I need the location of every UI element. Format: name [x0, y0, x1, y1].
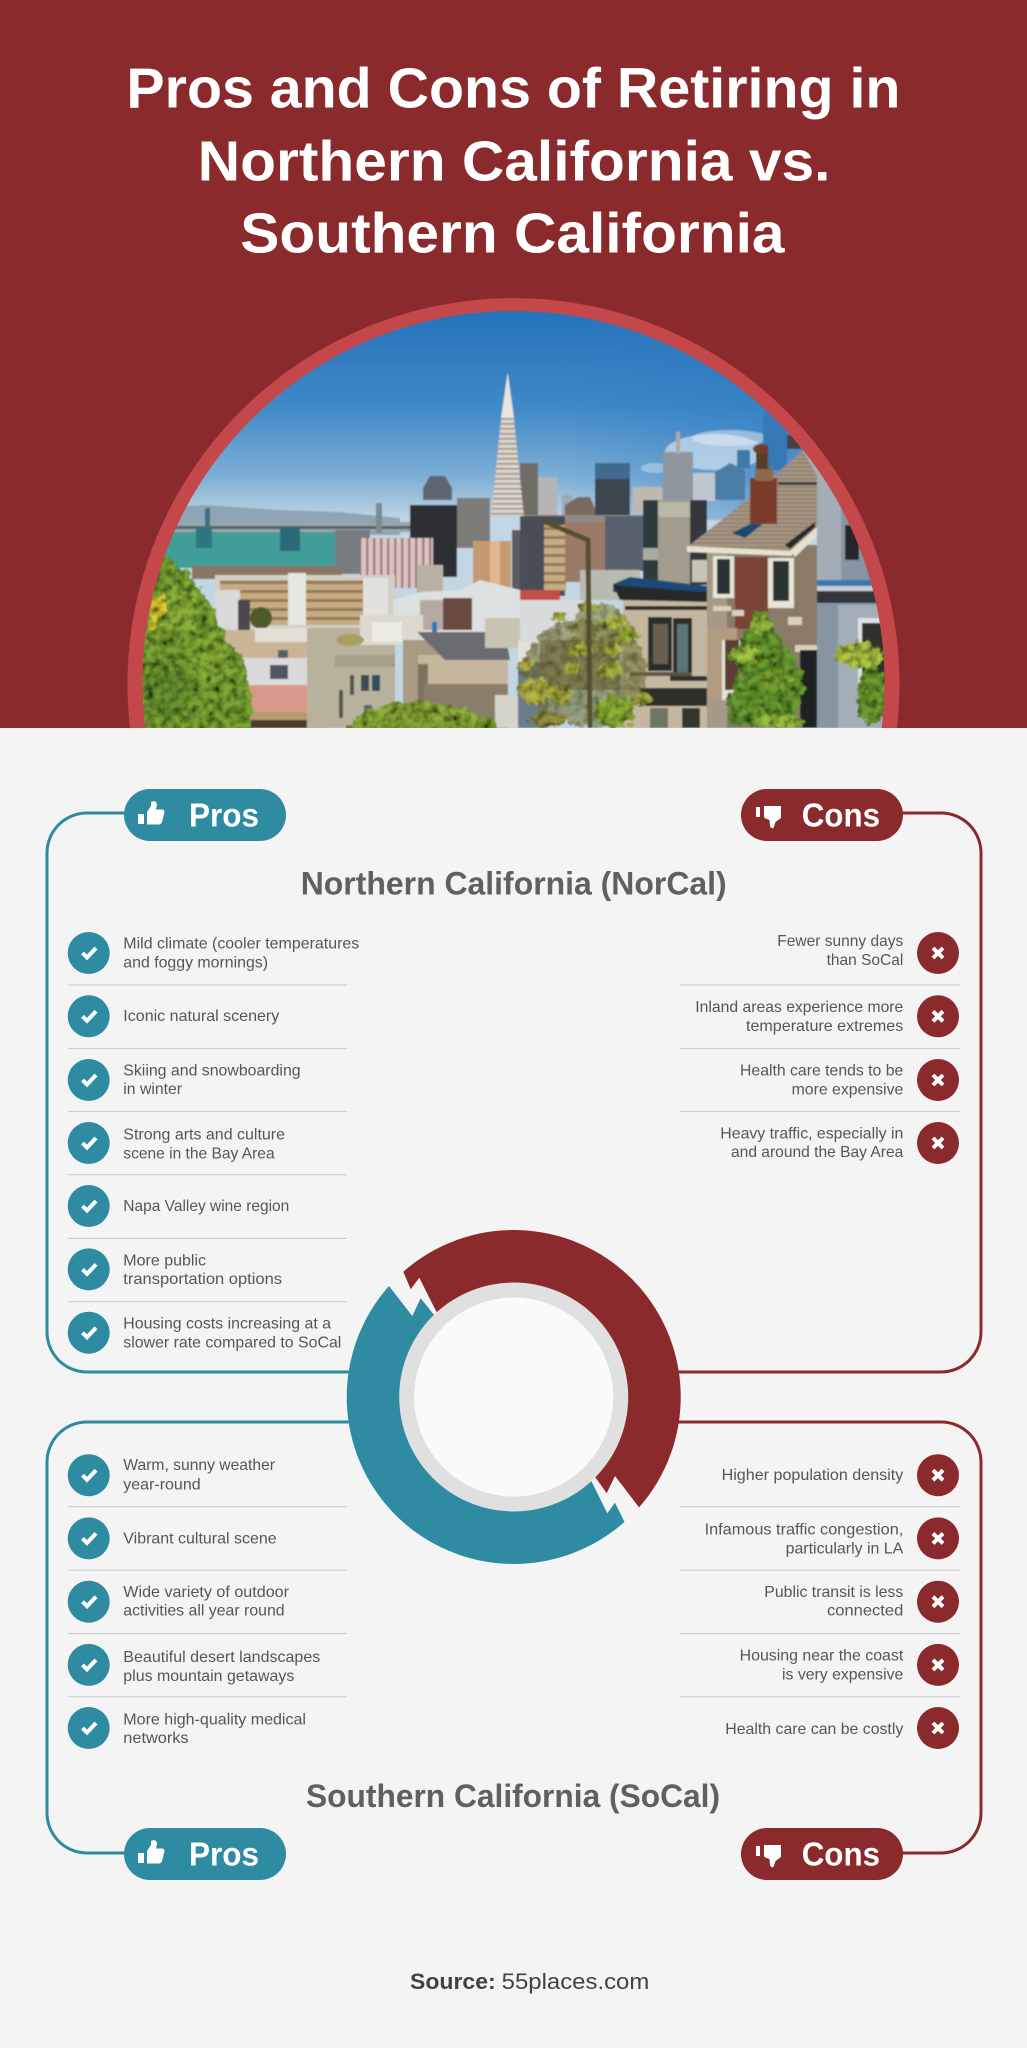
SoCal cons list: Public transit is less [764, 1584, 903, 1601]
icon: thumbs up [138, 1840, 164, 1864]
SoCal pros list: networks [123, 1730, 189, 1747]
left house [613, 500, 709, 728]
NorCal pros badge: Pros [189, 796, 259, 834]
NorCal pros badge [124, 789, 286, 841]
right house [816, 478, 884, 728]
NorCal cons list: Health care tends to be [740, 1062, 903, 1080]
NorCal cons list: Inland areas experience more [695, 999, 903, 1016]
SoCal cons list: Housing near the coast [740, 1647, 904, 1664]
NorCal pros list: Skiing and snowboarding [123, 1062, 301, 1080]
green mound [345, 699, 498, 728]
icon: thumbs down [756, 1845, 781, 1867]
SoCal cons list: is very expensive [782, 1666, 903, 1683]
NorCal pros list: slower rate compared to SoCal [123, 1334, 341, 1351]
NorCal cons list: Fewer sunny days [777, 933, 903, 950]
source: Source: [410, 1969, 496, 1994]
donut: pros arc [347, 1286, 624, 1564]
panel: NorCal pros connector line [47, 813, 352, 1372]
SoCal cons list: Infamous traffic congestion, [705, 1521, 903, 1538]
heading: Southern California: Southern California (SoCal) [306, 1778, 720, 1814]
NorCal cons list: and around the Bay Area [731, 1144, 903, 1161]
SoCal cons badge: Cons [802, 1836, 880, 1872]
heading: Northern California: Northern California (NorCal) [301, 866, 727, 902]
panel: SoCal pros connector line [47, 1422, 352, 1853]
panel: NorCal cons connector line [678, 813, 981, 1372]
donut: white center [414, 1298, 613, 1496]
left big tree [135, 553, 252, 735]
SoCal pros list: plus mountain getaways [123, 1668, 294, 1685]
photo: San Francisco skyline [142, 311, 884, 728]
roof and chimney [686, 443, 824, 558]
NorCal pros list: in winter [123, 1081, 183, 1098]
street lamp pole [543, 521, 590, 728]
SoCal pros badge [124, 1828, 286, 1880]
NorCal cons list: than SoCal [827, 952, 903, 969]
NorCal pros list: Iconic natural scenery [123, 1008, 279, 1025]
NorCal cons list [680, 932, 960, 1164]
icon: thumbs down [756, 806, 781, 828]
SoCal pros list [68, 1454, 347, 1749]
center donut chart [347, 1230, 681, 1564]
source [410, 1969, 649, 1994]
SoCal cons badge [741, 1828, 903, 1880]
title: Southern California [240, 202, 786, 266]
SoCal cons list: connected [827, 1603, 903, 1620]
middle tree [518, 601, 653, 728]
NorCal cons badge: Cons [802, 796, 880, 834]
NorCal pros list: Housing costs increasing at a [123, 1316, 331, 1333]
title: Northern California vs. [198, 129, 830, 193]
main house [706, 544, 818, 728]
NorCal pros list [68, 932, 359, 1354]
NorCal cons list: Heavy traffic, especially in [720, 1125, 903, 1142]
NorCal pros list: Mild climate (cooler temperatures [123, 936, 359, 953]
SoCal pros list: year-round [123, 1476, 201, 1493]
SoCal cons list: Higher population density [722, 1467, 903, 1484]
icon: thumbs up [138, 801, 164, 824]
NorCal pros list: Napa Valley wine region [123, 1198, 289, 1215]
SoCal pros list: Warm, sunny weather [123, 1457, 276, 1474]
header panel [0, 0, 1027, 728]
SoCal pros list: More high-quality medical [123, 1711, 306, 1728]
NorCal pros list: transportation options [123, 1271, 282, 1288]
SoCal pros list: Vibrant cultural scene [123, 1530, 277, 1547]
SoCal cons list: particularly in LA [786, 1540, 904, 1557]
NorCal pros list: scene in the Bay Area [123, 1145, 275, 1162]
NorCal cons list: more expensive [792, 1081, 903, 1098]
NorCal cons badge [741, 789, 903, 841]
donut: grey ring [399, 1282, 628, 1512]
panel: SoCal cons connector line [678, 1422, 981, 1853]
NorCal pros list: More public [123, 1252, 206, 1269]
NorCal pros list: and foggy mornings) [123, 954, 268, 971]
SoCal pros list: Beautiful desert landscapes [123, 1649, 320, 1666]
title: Pros and Cons of Retiring in [126, 57, 900, 121]
right tree [727, 612, 806, 729]
NorCal cons list: temperature extremes [746, 1018, 903, 1035]
SoCal pros badge: Pros [189, 1836, 259, 1872]
source: 55places.com [502, 1969, 649, 1994]
SoCal cons list [680, 1454, 960, 1749]
NorCal pros list: Strong arts and culture [123, 1127, 285, 1144]
arch ring [127, 298, 899, 728]
SoCal pros list: activities all year round [123, 1603, 285, 1620]
donut: cons arc [403, 1230, 681, 1507]
SoCal pros list: Wide variety of outdoor [123, 1584, 290, 1601]
SoCal cons list: Health care can be costly [725, 1721, 903, 1738]
far right tree [834, 642, 888, 725]
title [126, 57, 900, 265]
